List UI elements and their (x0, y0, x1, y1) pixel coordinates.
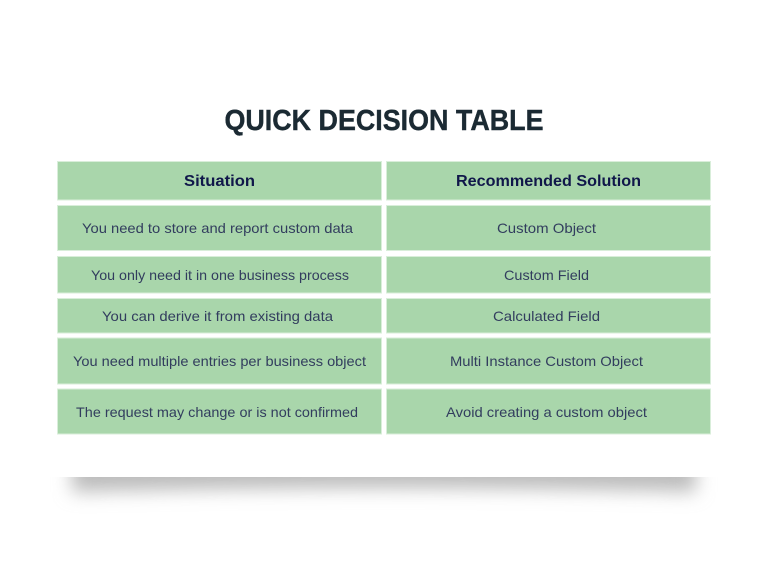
row 1 solution (386, 206, 710, 250)
row 5 solution: Avoid creating a custom object (446, 404, 647, 420)
header cell: Recommended Solution: Recommended Solution (456, 173, 641, 190)
header cell: Recommended Solution (386, 162, 710, 200)
row 4 situation: You need multiple entries per business object (73, 353, 366, 369)
title: QUICK DECISION TABLE (224, 105, 544, 137)
row 5 situation: The request may change or is not confirmed (76, 404, 358, 420)
table (58, 162, 710, 434)
row 3 situation (58, 298, 382, 333)
row 4 situation (58, 338, 382, 384)
row 5 solution (386, 389, 710, 434)
row 2 situation: You only need it in one business process (91, 267, 349, 283)
row 3 situation: You can derive it from existing data (102, 308, 333, 324)
row 5 situation (58, 389, 382, 434)
panel drop shadow (62, 477, 706, 502)
row 1 situation: You need to store and report custom data (82, 220, 353, 236)
row 4 solution (386, 338, 710, 384)
header cell: Situation (58, 162, 382, 200)
row 3 solution (386, 298, 710, 333)
row 1 situation (58, 206, 382, 250)
row 3 solution: Calculated Field (493, 308, 600, 324)
row 1 solution: Custom Object (497, 220, 596, 236)
header cell: Situation: Situation (184, 173, 255, 190)
row 4 solution: Multi Instance Custom Object (450, 353, 643, 369)
row 2 situation (58, 256, 382, 293)
row 2 solution: Custom Field (504, 267, 589, 283)
row 2 solution (386, 256, 710, 293)
